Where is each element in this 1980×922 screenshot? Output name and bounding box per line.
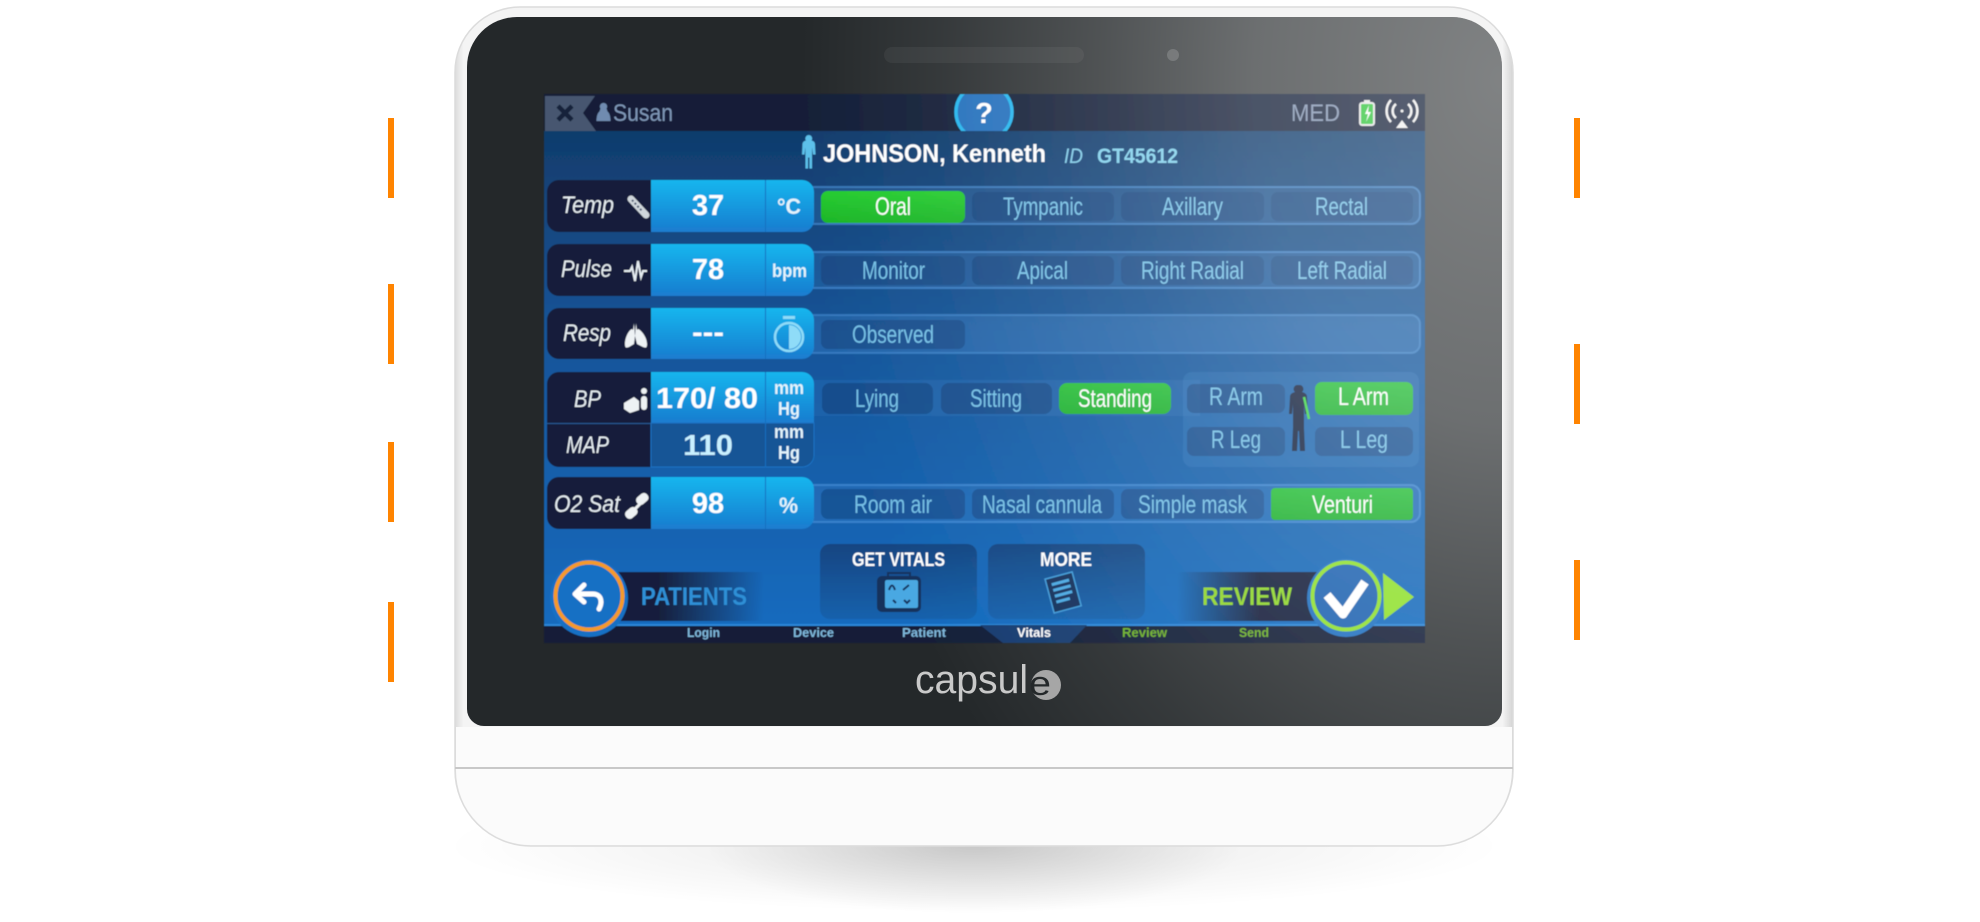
callout marker left 3 — [388, 442, 394, 522]
temp options — [800, 187, 1420, 224]
patient name: JOHNSON, Kenneth — [823, 140, 1046, 168]
chin seam — [455, 767, 1513, 769]
limb selector: L Arm — [1338, 383, 1389, 411]
user icon — [596, 103, 610, 121]
pulse options: Apical — [1017, 257, 1068, 285]
icon: stopwatch — [775, 316, 803, 351]
o2 label — [547, 477, 651, 529]
temp options: Axillary — [1162, 193, 1223, 221]
step navigation — [544, 624, 1425, 643]
speaker grille — [884, 47, 1084, 63]
temp options: Rectal — [1315, 193, 1368, 221]
camera — [1167, 49, 1179, 61]
oxygen saturation row: O2 Sat — [554, 491, 621, 518]
oxygen saturation row: % — [779, 493, 798, 518]
position options: Standing — [1078, 385, 1152, 413]
temp options: Oral — [875, 193, 911, 221]
icon: cuff — [624, 388, 647, 413]
temperature row: Temp — [561, 192, 614, 219]
temperature row: °C — [777, 194, 801, 219]
resp options: Observed — [852, 321, 934, 349]
active step tab — [980, 625, 1087, 643]
limb selector: R Arm — [1209, 383, 1263, 411]
icon: battery — [1360, 100, 1374, 125]
temperature row: 37 — [692, 190, 724, 222]
bezel — [467, 17, 1502, 726]
more button — [988, 544, 1145, 619]
oxygen saturation row — [547, 477, 1420, 529]
callout marker right 2 — [1574, 344, 1580, 424]
step navigation: Login — [687, 625, 720, 640]
blood pressure row: MAP — [566, 432, 609, 459]
bezel glare — [868, 17, 1502, 726]
pulse row: 78 — [692, 254, 724, 286]
blood pressure row: Hg — [778, 399, 800, 419]
device shadow — [444, 778, 1504, 914]
icon: pulse trace — [624, 261, 647, 281]
temperature row — [547, 180, 1420, 232]
screen background — [544, 94, 1425, 643]
get vitals button: GET VITALS — [852, 550, 945, 571]
pulse label — [547, 244, 651, 296]
pulse row: bpm — [772, 261, 807, 281]
blood pressure row: mm — [774, 378, 804, 398]
limb selector — [1183, 372, 1419, 467]
icon: thermometer — [631, 199, 646, 215]
step navigation: Device — [793, 625, 834, 640]
more button: MORE — [1040, 550, 1092, 571]
o2 options — [800, 485, 1420, 522]
ID label: ID — [1064, 145, 1083, 168]
icon: back arrow — [575, 585, 601, 609]
MED label: MED — [1291, 100, 1340, 127]
patient header — [802, 135, 1178, 168]
position options — [800, 380, 1200, 416]
step navigation: Vitals — [1017, 625, 1051, 640]
icon: patient figure — [802, 135, 816, 168]
back button — [550, 559, 628, 637]
position options: Lying — [855, 385, 899, 413]
device — [455, 7, 1513, 846]
blood pressure row: 110 — [683, 430, 733, 462]
resp label — [547, 308, 651, 359]
temp options: Tympanic — [1003, 193, 1083, 221]
review button — [1307, 559, 1414, 637]
blood pressure row: BP — [574, 386, 601, 413]
step navigation: Patient — [902, 625, 947, 640]
oxygen saturation row: 98 — [692, 488, 724, 520]
position options: Sitting — [970, 385, 1022, 413]
capsule logo: capsul — [915, 658, 1028, 702]
pulse options — [800, 252, 1420, 288]
blood pressure row — [547, 372, 1419, 467]
pulse options: Monitor — [862, 257, 925, 285]
back button band: PATIENTS — [641, 583, 747, 611]
icon: body figure — [1289, 385, 1309, 451]
step navigation: Review — [1122, 625, 1168, 640]
ID value: GT45612 — [1097, 145, 1178, 168]
o2 options: Simple mask — [1138, 491, 1247, 519]
icon: lungs — [625, 323, 647, 348]
o2 options: Venturi — [1312, 491, 1373, 519]
next arrow — [1383, 573, 1414, 620]
callout marker left 1 — [388, 118, 394, 198]
help button: ? — [975, 98, 993, 130]
icon: check mark — [1327, 582, 1365, 614]
device white shell — [455, 7, 1513, 846]
bp label — [547, 372, 651, 467]
respiration row: Resp — [563, 320, 611, 347]
respiration row — [547, 308, 1420, 359]
o2 options: Room air — [854, 491, 932, 519]
icon: finger clip — [623, 491, 650, 521]
touchscreen — [544, 84, 1425, 643]
blood pressure row: 170/ 80 — [656, 383, 758, 415]
icon: wireless — [1387, 100, 1417, 128]
review band: REVIEW — [1202, 583, 1292, 611]
icon: document — [1045, 572, 1081, 613]
screen glare — [544, 94, 1425, 643]
limb selector: R Leg — [1211, 426, 1261, 454]
get vitals button — [820, 544, 977, 619]
limb selector: L Leg — [1340, 426, 1388, 454]
device lower panel — [456, 727, 1512, 845]
blood pressure row: Hg — [778, 443, 800, 463]
step navigation: Send — [1239, 625, 1269, 640]
close button — [545, 96, 596, 131]
o2 options: Nasal cannula — [982, 491, 1102, 519]
callout marker right 1 — [1574, 118, 1580, 198]
icon: vitals monitor — [877, 573, 921, 612]
callout marker left 2 — [388, 284, 394, 364]
capsule logo: e — [1029, 665, 1051, 703]
pulse row: Pulse — [561, 256, 612, 283]
back button band — [589, 572, 764, 621]
blood pressure row: mm — [774, 422, 804, 442]
pulse row — [547, 244, 1420, 296]
review band — [1177, 572, 1327, 621]
callout marker right 3 — [1574, 560, 1580, 640]
callout marker left 4 — [388, 602, 394, 682]
user name: Susan — [613, 100, 673, 127]
temp label — [547, 180, 651, 232]
resp dashes: --- — [692, 317, 724, 349]
help button — [954, 93, 1014, 132]
resp options — [800, 315, 1420, 353]
top status bar — [544, 93, 1426, 132]
pulse options: Left Radial — [1297, 257, 1387, 285]
pulse options: Right Radial — [1141, 257, 1244, 285]
